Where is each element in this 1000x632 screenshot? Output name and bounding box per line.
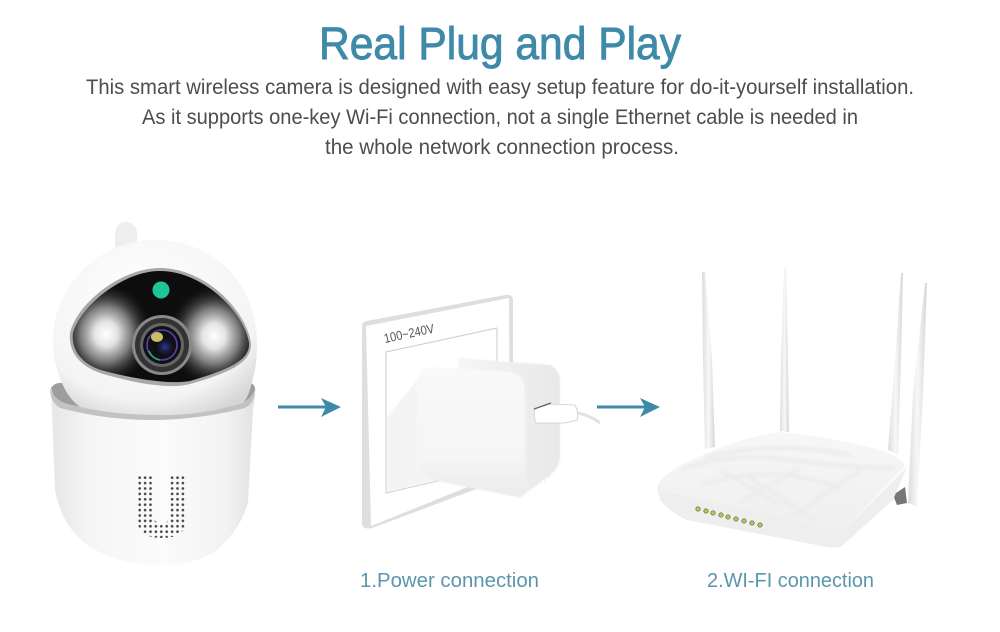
router top pattern — [680, 448, 895, 520]
antenna 4 — [908, 283, 927, 507]
adapter rear ribbed section — [458, 358, 560, 498]
arrow 1 — [278, 398, 341, 417]
speaker grille U — [137, 475, 187, 538]
antenna 2 — [780, 268, 789, 432]
router body — [657, 432, 905, 531]
label: power connection: 1.Power connection — [360, 570, 539, 592]
router front face — [657, 467, 907, 548]
antenna 3 — [888, 273, 903, 455]
intro text: the whole network connection process. — [325, 136, 679, 159]
title: Real Plug and Play — [319, 18, 681, 69]
router illustration — [657, 268, 927, 548]
lens — [132, 315, 192, 375]
USB plug and cable — [534, 403, 600, 423]
adapter shadow — [387, 380, 432, 492]
camera base interior — [51, 383, 255, 418]
dark visor — [60, 268, 260, 386]
green indicator — [152, 282, 170, 298]
camera base rim — [50, 388, 255, 420]
router connector — [893, 487, 907, 505]
wall plate — [362, 295, 513, 528]
socket inner outline — [386, 328, 497, 493]
adapter front — [417, 367, 525, 496]
intro text: As it supports one-key Wi-Fi connection, not a single Ethernet cable is needed in — [142, 106, 858, 129]
intro text — [86, 76, 914, 159]
camera head dome — [53, 240, 257, 415]
camera base cup — [51, 395, 255, 565]
voltage label: 100~240V — [383, 321, 436, 346]
camera illustration — [50, 222, 260, 565]
power adapter illustration — [362, 295, 600, 528]
arrow 2 — [597, 398, 660, 417]
label: wi-fi connection: 2.WI-FI connection — [707, 570, 874, 592]
antenna 1 — [702, 272, 715, 449]
camera antenna stub — [115, 222, 137, 250]
intro text: This smart wireless camera is designed with easy setup feature for do-it-yourself installation. — [86, 76, 914, 99]
status LEDs — [696, 507, 762, 527]
